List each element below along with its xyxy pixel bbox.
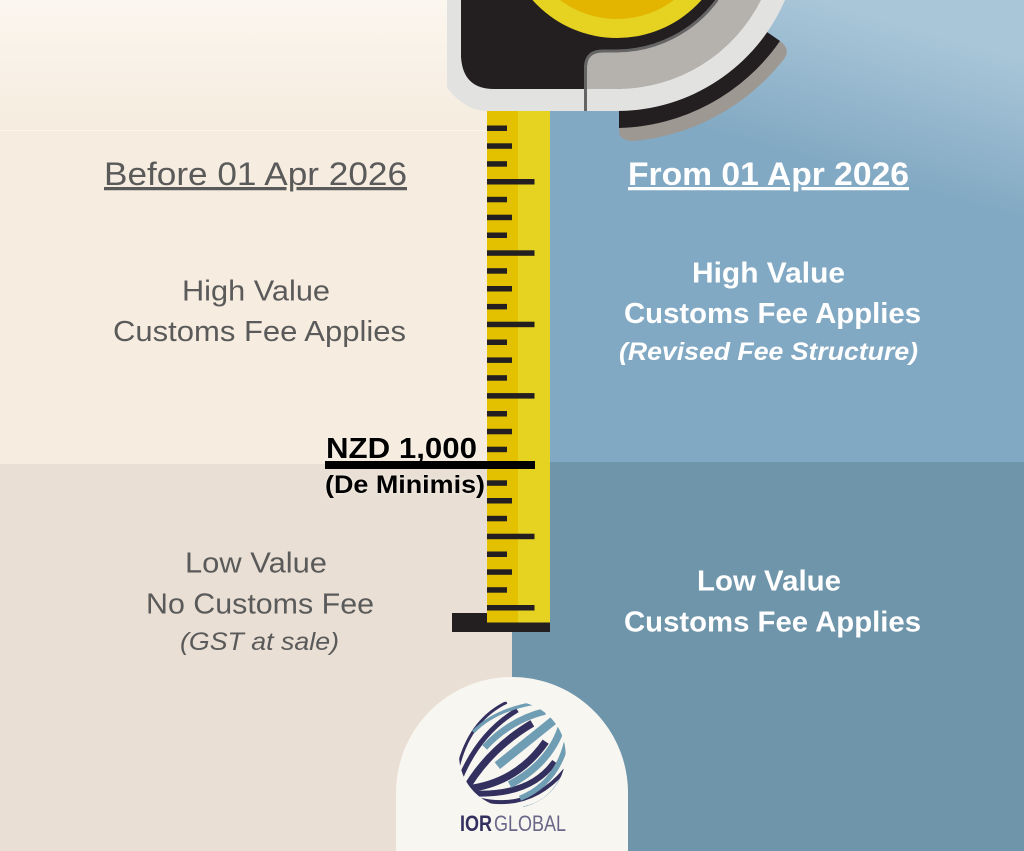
icon: IOR Global globe xyxy=(458,702,567,807)
panel: from, high value background xyxy=(512,0,1024,462)
text: from, low value: Low Value xyxy=(697,566,841,598)
text: before, high value: High Value xyxy=(182,276,330,308)
threshold marker: NZD 1,000 de minimis xyxy=(325,433,535,499)
case panel edge xyxy=(586,0,717,89)
text: from, low value xyxy=(624,566,921,638)
case foot xyxy=(619,32,780,128)
panel: from, low value background xyxy=(512,462,1024,851)
tick marks xyxy=(487,126,534,610)
text: before, high value xyxy=(113,276,406,348)
text: from, low value: Customs Fee Applies xyxy=(624,606,921,638)
case outer shell xyxy=(447,0,785,111)
panel: before, low value background xyxy=(0,464,512,851)
threshold marker: NZD 1,000 de minimis: NZD 1,000 xyxy=(326,433,477,465)
tape measure case xyxy=(447,0,787,141)
text: from, high value: (Revised Fee Structure) xyxy=(619,338,918,366)
text: from, high value: Customs Fee Applies xyxy=(624,298,921,330)
threshold marker: NZD 1,000 de minimis: NZD 1,000 xyxy=(326,433,477,465)
text: from, high value: High Value xyxy=(692,258,845,290)
text: before, low value: Low Value xyxy=(185,548,327,580)
text: before, low value: No Customs Fee xyxy=(146,588,374,620)
text: from, high value xyxy=(619,258,921,366)
text: before, high value: Customs Fee Applies xyxy=(113,316,406,348)
case seam xyxy=(584,89,587,111)
case black face xyxy=(461,0,735,89)
text: before, low value: (GST at sale) xyxy=(180,628,339,656)
logo wordmark xyxy=(460,811,566,836)
tape measure blade xyxy=(452,105,550,632)
case foot shadow xyxy=(619,20,787,141)
heading: from: From 01 Apr 2026 xyxy=(628,156,909,192)
panel: before, high value background xyxy=(0,0,512,465)
logo wordmark: GLOBAL xyxy=(494,811,566,836)
heading: before: Before 01 Apr 2026 xyxy=(104,156,407,192)
threshold marker: NZD 1,000 de minimis: (De Minimis) xyxy=(325,471,485,499)
threshold marker: NZD 1,000 de minimis: (De Minimis) xyxy=(325,471,485,499)
text: before, low value xyxy=(146,548,374,656)
logo wordmark: IOR xyxy=(460,811,492,836)
case grey panel xyxy=(587,0,761,111)
logo badge xyxy=(396,677,628,851)
tape end hook xyxy=(452,613,550,632)
reel centre xyxy=(522,0,712,19)
reel yellow ring xyxy=(504,0,730,38)
